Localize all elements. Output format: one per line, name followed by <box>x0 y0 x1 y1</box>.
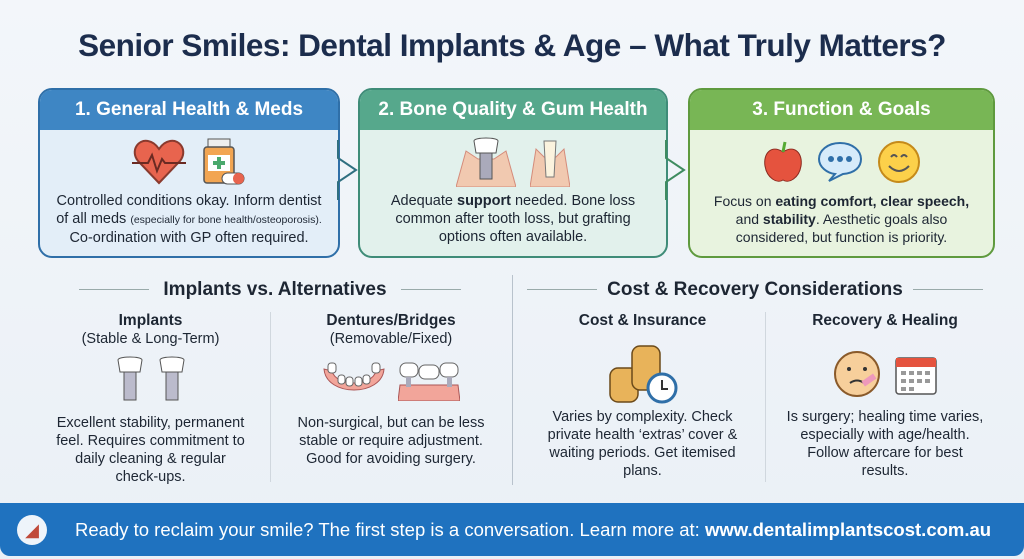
panel: function & goals <box>688 88 995 258</box>
panel: bone quality <box>358 88 668 258</box>
footer banner: Ready to reclaim your smile? The first step is a conversation. Learn more at: www.dentalimplantscost.com.au <box>75 519 991 540</box>
column: dentures: Dentures/Bridges <box>326 312 456 329</box>
column: implants: (Stable & Long-Term) <box>82 331 219 347</box>
icons: apple, speech, smile <box>764 141 920 183</box>
column: dentures: Good for avoiding surgery. <box>306 451 476 467</box>
panel header 2: 2. Bone Quality & Gum Health <box>378 99 648 120</box>
text: bone: options often available. <box>439 229 587 245</box>
column: dentures: stable or require adjustment. <box>299 433 483 449</box>
panel header 3: 3. Function & Goals <box>752 99 931 120</box>
text: general health: of all meds (especially for bone health/osteoporosis). <box>56 211 322 227</box>
arrow connector 1 <box>337 140 358 200</box>
text: function: considered, but function is priority. <box>736 229 947 245</box>
title: Senior Smiles: Dental Implants & Age – What Truly Matters? <box>78 27 946 63</box>
footer banner <box>0 503 1024 556</box>
column: dentures: (Removable/Fixed) <box>330 331 452 347</box>
panel: general health <box>38 88 340 258</box>
column: implants: feel. Requires commitment to <box>56 433 245 449</box>
column: implants: Excellent stability, permanent <box>57 415 244 431</box>
column: recovery: especially with age/health. <box>800 427 970 443</box>
arrow connector 2 <box>665 140 686 200</box>
column: dentures <box>298 312 484 467</box>
column: implants: Implants <box>119 312 182 329</box>
panel header 1 <box>40 90 338 130</box>
panel header 2 <box>360 90 666 130</box>
icons: heart and pills <box>132 138 244 184</box>
text: general health: Controlled conditions okay. Inform dentist <box>57 193 321 209</box>
column: recovery: results. <box>862 463 908 479</box>
text: function <box>714 193 969 245</box>
icon: coins and clock <box>609 345 678 404</box>
text: bone: common after tooth loss, but grafting <box>395 211 631 227</box>
text: general health: Co-ordination with GP often required. <box>69 230 309 246</box>
icon: implants <box>118 356 184 400</box>
panel header 1: 1. General Health & Meds <box>75 99 303 120</box>
icon: smile badge <box>17 515 47 545</box>
column: implants: daily cleaning & regular <box>75 451 226 467</box>
column: recovery: Is surgery; healing time varies, <box>787 409 983 425</box>
column: cost & insurance: plans. <box>623 463 662 479</box>
column: cost & insurance <box>548 312 738 479</box>
icon: face and calendar <box>834 351 937 397</box>
icons: implant in bone <box>456 138 570 187</box>
text: function: and stability. Aesthetic goals also <box>736 211 947 227</box>
column: recovery: Follow aftercare for best <box>807 445 963 461</box>
column: recovery: Recovery & Healing <box>812 312 958 329</box>
column: cost & insurance: waiting periods. Get itemised <box>549 445 736 461</box>
column: implants <box>56 312 245 485</box>
heading: cost & recovery: Cost & Recovery Considerations <box>607 279 903 300</box>
column: cost & insurance: Cost & Insurance <box>579 312 706 329</box>
text: function: Focus on eating comfort, clear speech, <box>714 193 969 209</box>
column: dentures: Non-surgical, but can be less <box>298 415 484 431</box>
panel header 3 <box>690 90 993 130</box>
heading: implants vs alternatives: Implants vs. Alternatives <box>163 279 387 300</box>
icon: smile badge: ◢ <box>25 520 39 540</box>
column: recovery <box>787 312 983 479</box>
column: implants: check-ups. <box>115 469 186 485</box>
text: bone <box>390 193 635 245</box>
text: general health <box>56 193 322 246</box>
icon: denture and bridge <box>324 362 460 401</box>
column: cost & insurance: private health ‘extras’ cover & <box>548 427 737 443</box>
column: cost & insurance: Varies by complexity. Check <box>553 409 732 425</box>
text: bone: Adequate support needed. Bone loss <box>391 193 635 209</box>
